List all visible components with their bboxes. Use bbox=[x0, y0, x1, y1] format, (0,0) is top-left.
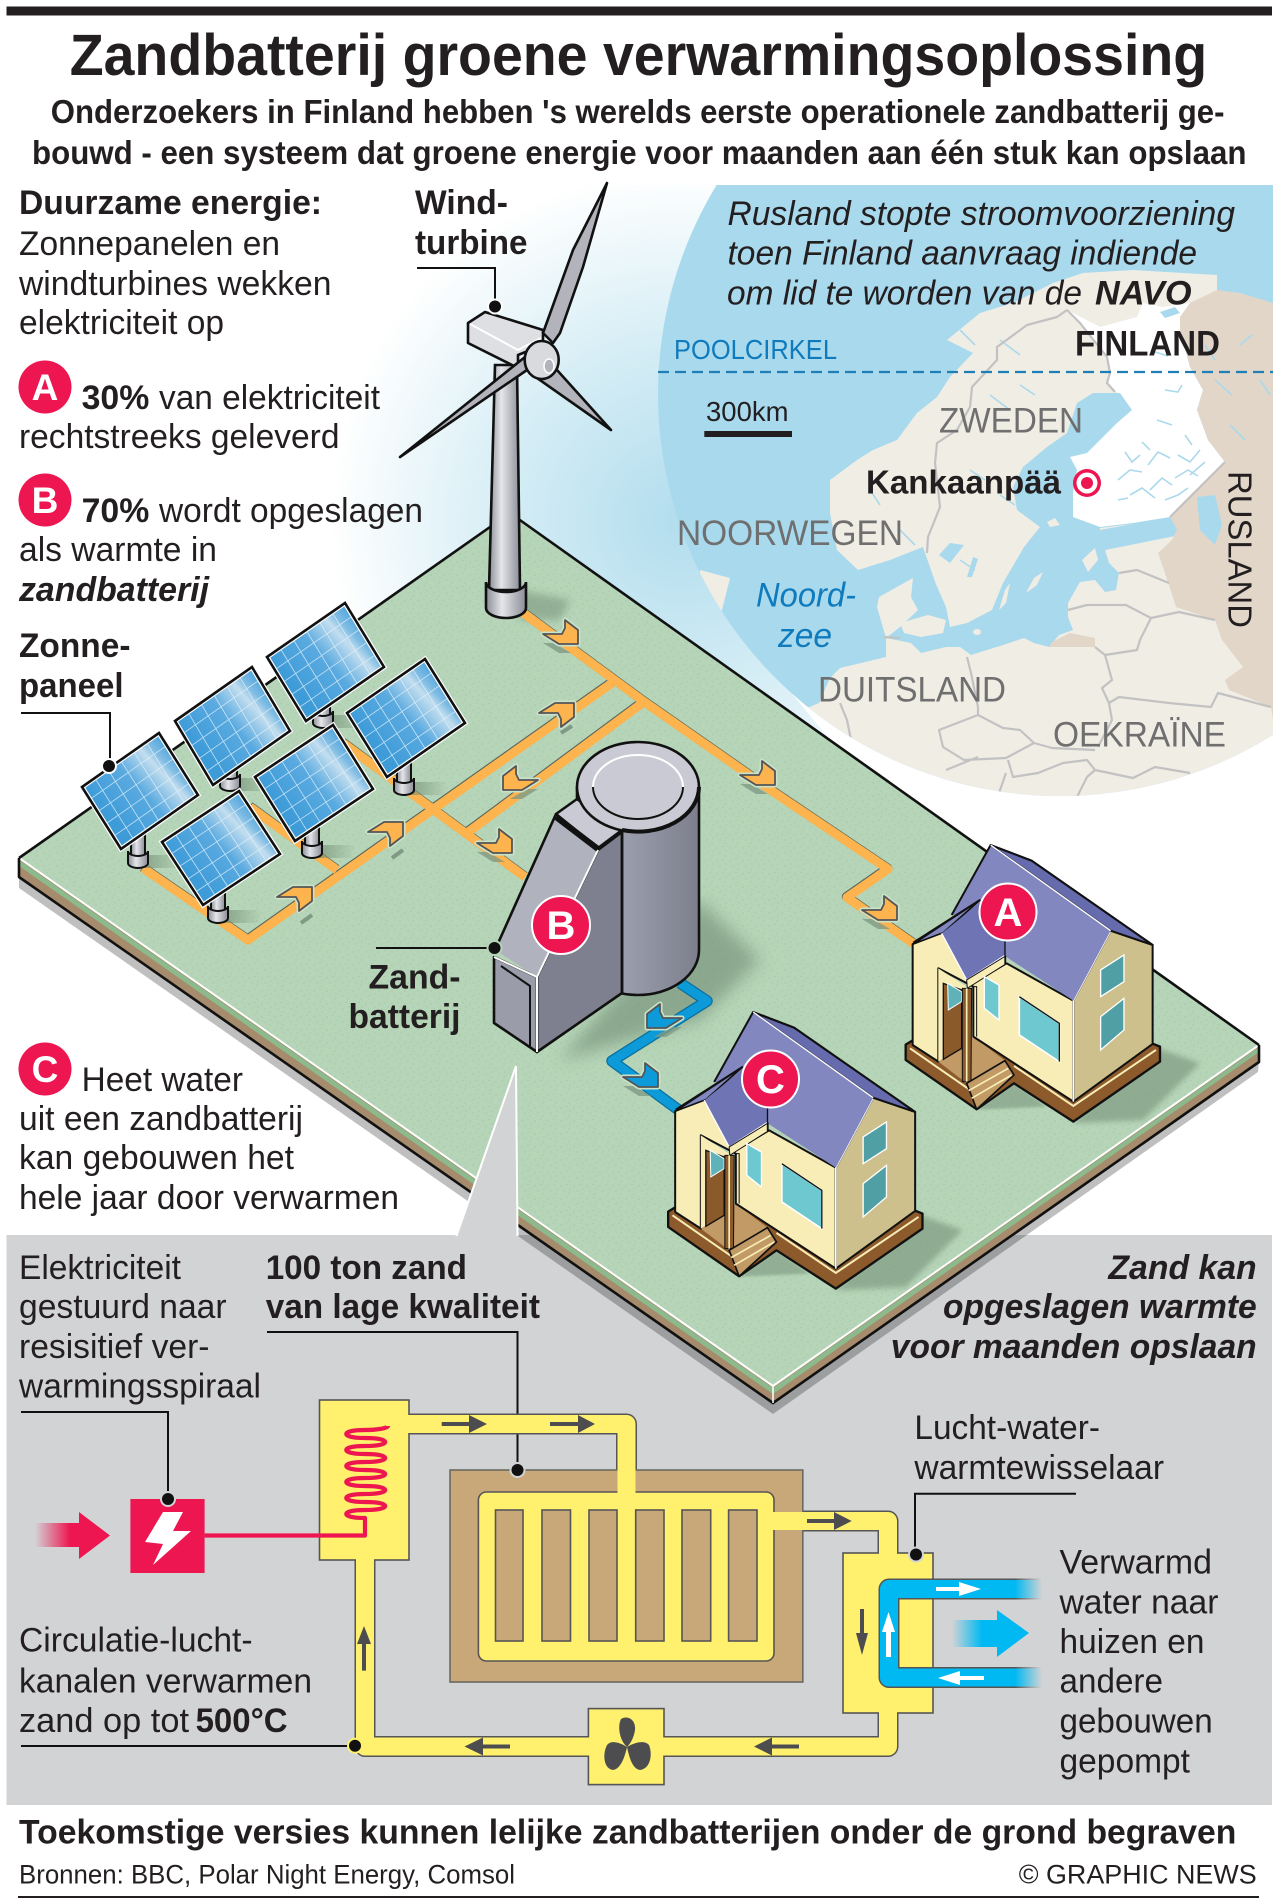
text: Duurzame energie: Duurzame energie: bbox=[19, 184, 322, 222]
badge C on house bbox=[742, 1050, 799, 1108]
badge C and text: C bbox=[32, 1049, 58, 1090]
text: verwarmd water: Verwarmd bbox=[1060, 1544, 1212, 1582]
text: Lucht-water-warmtewisselaar bbox=[908, 1409, 1164, 1562]
badge A and text: A bbox=[32, 367, 58, 408]
text: verwarmd water: gebouwen bbox=[1060, 1703, 1213, 1741]
hub bbox=[525, 341, 559, 379]
white water arrows bbox=[882, 1582, 984, 1685]
leader dot: electricity bbox=[160, 1491, 176, 1507]
house C bbox=[668, 1012, 962, 1290]
sky glow bbox=[364, 204, 827, 736]
label: Windturbine: turbine bbox=[415, 224, 528, 262]
map note: NAVO bbox=[1095, 274, 1192, 312]
diagram: heat exchanger bbox=[843, 1553, 933, 1713]
text: verwarmd water bbox=[1059, 1544, 1218, 1781]
label: Zandbatterij: Zand- bbox=[368, 959, 460, 997]
label: Windturbine bbox=[415, 184, 528, 314]
sources: Bronnen: BBC, Polar Night Energy, Comsol bbox=[19, 1860, 515, 1890]
subtitle: bouwd - een systeem dat groene energie voor maanden aan één stuk kan opslaan bbox=[32, 134, 1246, 171]
text: Duurzame energie: Zonnepanelen en bbox=[19, 225, 280, 263]
text: zand kan warmte opslaan: Zand kan bbox=[1107, 1249, 1257, 1287]
label: Oekraïne: OEKRAÏNE bbox=[1053, 716, 1226, 754]
cylinder bbox=[577, 787, 699, 995]
nacelle bbox=[468, 312, 543, 368]
scale bar: 300km bbox=[706, 396, 788, 427]
badge C on house: C bbox=[756, 1058, 785, 1102]
text: circulatie: 500°C bbox=[196, 1702, 288, 1740]
icon: location target bbox=[1073, 469, 1101, 497]
label: Noordzee: Noord- bbox=[756, 577, 856, 615]
map note: toen Finland aanvraag indiende bbox=[728, 234, 1197, 272]
subtitle bbox=[32, 93, 1246, 171]
label: Finland: FINLAND bbox=[1075, 324, 1220, 364]
land: Britain bbox=[700, 570, 730, 611]
tower bbox=[489, 365, 520, 590]
badge B and text: wordt opgeslagen bbox=[158, 492, 423, 530]
arctic circle line bbox=[658, 371, 1273, 373]
badge C and text: Heet water bbox=[82, 1061, 243, 1099]
blades bbox=[400, 183, 611, 457]
badge A on house bbox=[980, 884, 1036, 940]
text: 100 ton zand: van lage kwaliteit bbox=[266, 1288, 540, 1326]
badge A on house: A bbox=[994, 891, 1022, 935]
text: verwarmd water: huizen en bbox=[1060, 1623, 1204, 1661]
panel: locator map bbox=[640, 185, 1278, 825]
label: Noordzee: zee bbox=[777, 617, 832, 655]
text: Duurzame energie: elektriciteit op bbox=[19, 304, 224, 342]
label: Duitsland: DUITSLAND bbox=[818, 670, 1006, 710]
text: Duurzame energie bbox=[18, 184, 331, 342]
label: Noordzee bbox=[756, 577, 856, 655]
badge B and text: zandbatterij bbox=[18, 571, 210, 609]
solar panels bbox=[82, 603, 465, 923]
box front bbox=[494, 957, 537, 1052]
badge A and text: rechtstreeks geleverd bbox=[19, 418, 340, 456]
land: Kaliningrad bbox=[1049, 633, 1095, 647]
map note: Rusland stopte stroomvoorziening bbox=[728, 195, 1235, 233]
badge C and text: kan gebouwen het bbox=[19, 1139, 294, 1177]
badge C and text bbox=[18, 1042, 399, 1217]
shadows of battery bbox=[560, 900, 760, 1060]
land: Russia bbox=[1158, 290, 1273, 720]
sand battery bbox=[494, 742, 699, 1052]
text: elektriciteit: gestuurd naar bbox=[19, 1288, 227, 1326]
text: zand kan warmte opslaan bbox=[891, 1249, 1257, 1366]
badge B on battery: B bbox=[547, 904, 575, 948]
badge C and text: hele jaar door verwarmen bbox=[19, 1179, 399, 1217]
text: circulatie bbox=[19, 1622, 363, 1754]
badge A and text: 30% bbox=[82, 379, 149, 417]
label: Zweden: ZWEDEN bbox=[939, 402, 1083, 440]
orange energy pipes bbox=[143, 611, 917, 946]
badge B and text: 70% bbox=[82, 492, 149, 530]
label: Windturbine: Wind- bbox=[415, 184, 508, 222]
air flow arrows bbox=[357, 1415, 868, 1756]
borders bbox=[840, 310, 1271, 797]
badge C and text: uit een zandbatterij bbox=[19, 1100, 303, 1138]
tower base bbox=[486, 582, 526, 618]
text: Duurzame energie: windturbines wekken bbox=[18, 265, 331, 303]
diagram: hot water pipe bbox=[889, 1578, 1042, 1688]
diagram: air ducts bbox=[365, 1424, 888, 1746]
text: Lucht-water-warmtewisselaar: Lucht-water- bbox=[914, 1409, 1100, 1447]
label: Zonnepaneel: paneel bbox=[19, 667, 124, 705]
text: elektriciteit: resisitief ver- bbox=[19, 1328, 210, 1366]
heating coil and wire bbox=[205, 1426, 388, 1536]
bottom rule bbox=[18, 1896, 1259, 1898]
callout wedge bbox=[456, 1066, 518, 1236]
box side bbox=[537, 832, 622, 1052]
text: zand kan warmte opslaan: opgeslagen warmte bbox=[943, 1288, 1257, 1326]
label: Zonnepaneel bbox=[19, 627, 130, 774]
leader dot: sand bbox=[510, 1462, 526, 1478]
badge B on battery bbox=[532, 896, 590, 954]
arrow: heated water out bbox=[952, 1610, 1029, 1657]
text: verwarmd water: gepompt bbox=[1060, 1743, 1190, 1781]
footer headline: Toekomstige versies kunnen lelijke zandbatterijen onder de grond begraven bbox=[19, 1814, 1236, 1852]
top rule bbox=[6, 6, 1272, 16]
icon: fan bbox=[604, 1717, 651, 1770]
badge A and text: van elektriciteit bbox=[159, 379, 380, 417]
label: Zandbatterij bbox=[348, 940, 502, 1036]
house A bbox=[906, 845, 1200, 1123]
subtitle: Onderzoekers in Finland hebben 's werelds eerste operationele zandbatterij ge- bbox=[51, 93, 1224, 130]
diagram: duct fill bbox=[365, 1424, 888, 1746]
wind turbine bbox=[400, 183, 611, 618]
land: mainland Europe bbox=[808, 536, 1273, 796]
flow arrows bbox=[277, 620, 897, 1096]
text: elektriciteit: warmingsspiraal bbox=[18, 1368, 261, 1406]
label: Rusland: RUSLAND bbox=[1222, 471, 1258, 628]
label: Noorwegen: NOORWEGEN bbox=[677, 514, 903, 553]
badge B and text: B bbox=[32, 480, 58, 521]
text: circulatie: Circulatie-lucht- bbox=[19, 1622, 253, 1660]
text: elektriciteit: Elektriciteit bbox=[19, 1249, 181, 1287]
map note bbox=[727, 195, 1235, 312]
text: circulatie: kanalen verwarmen bbox=[19, 1662, 312, 1700]
diagram: fan box bbox=[588, 1709, 664, 1785]
title: Zandbatterij groene verwarmingsoplossing bbox=[70, 23, 1207, 88]
blue hot-water pipe bbox=[612, 983, 707, 1111]
text: verwarmd water: water naar bbox=[1059, 1584, 1218, 1622]
diagram: heater box bbox=[320, 1400, 409, 1560]
text: 100 ton zand: 100 ton zand bbox=[266, 1249, 467, 1287]
land: islands bbox=[900, 518, 1133, 637]
shadow of turbine base bbox=[520, 590, 570, 620]
lakes bbox=[939, 307, 1222, 577]
text: zand kan warmte opslaan: voor maanden opslaan bbox=[891, 1328, 1257, 1366]
land: Finland bbox=[1067, 303, 1225, 527]
text: circulatie: zand op tot bbox=[19, 1702, 189, 1740]
arrow: electricity in bbox=[35, 1512, 110, 1559]
diagram: sand container bbox=[450, 1470, 803, 1682]
text: 100 ton zand bbox=[266, 1249, 540, 1470]
label: Zonnepaneel: Zonne- bbox=[19, 627, 130, 665]
text: elektriciteit bbox=[18, 1249, 261, 1499]
map note: om lid te worden van de bbox=[727, 274, 1082, 312]
label: Kankaanpää: Kankaanpää bbox=[866, 463, 1062, 500]
neck bbox=[556, 799, 622, 848]
badge B and text bbox=[18, 474, 423, 609]
badge B and text: als warmte in bbox=[19, 531, 217, 569]
red power box bbox=[130, 1499, 205, 1573]
text: Lucht-water-warmtewisselaar: warmtewisselaar bbox=[913, 1449, 1164, 1487]
label: Poolcirkel: POOLCIRKEL bbox=[674, 334, 837, 365]
badge A and text bbox=[18, 360, 380, 456]
sloped face bbox=[495, 814, 598, 977]
panel: grey diagram background bbox=[6, 1235, 1272, 1805]
isometric ground plate bbox=[19, 513, 1259, 1414]
label: Zandbatterij: batterij bbox=[348, 998, 460, 1036]
text: verwarmd water: andere bbox=[1060, 1662, 1163, 1700]
credit: © GRAPHIC NEWS bbox=[1019, 1860, 1257, 1890]
land: Norway and Sweden bbox=[830, 270, 1217, 627]
cylinder top bbox=[577, 742, 699, 832]
